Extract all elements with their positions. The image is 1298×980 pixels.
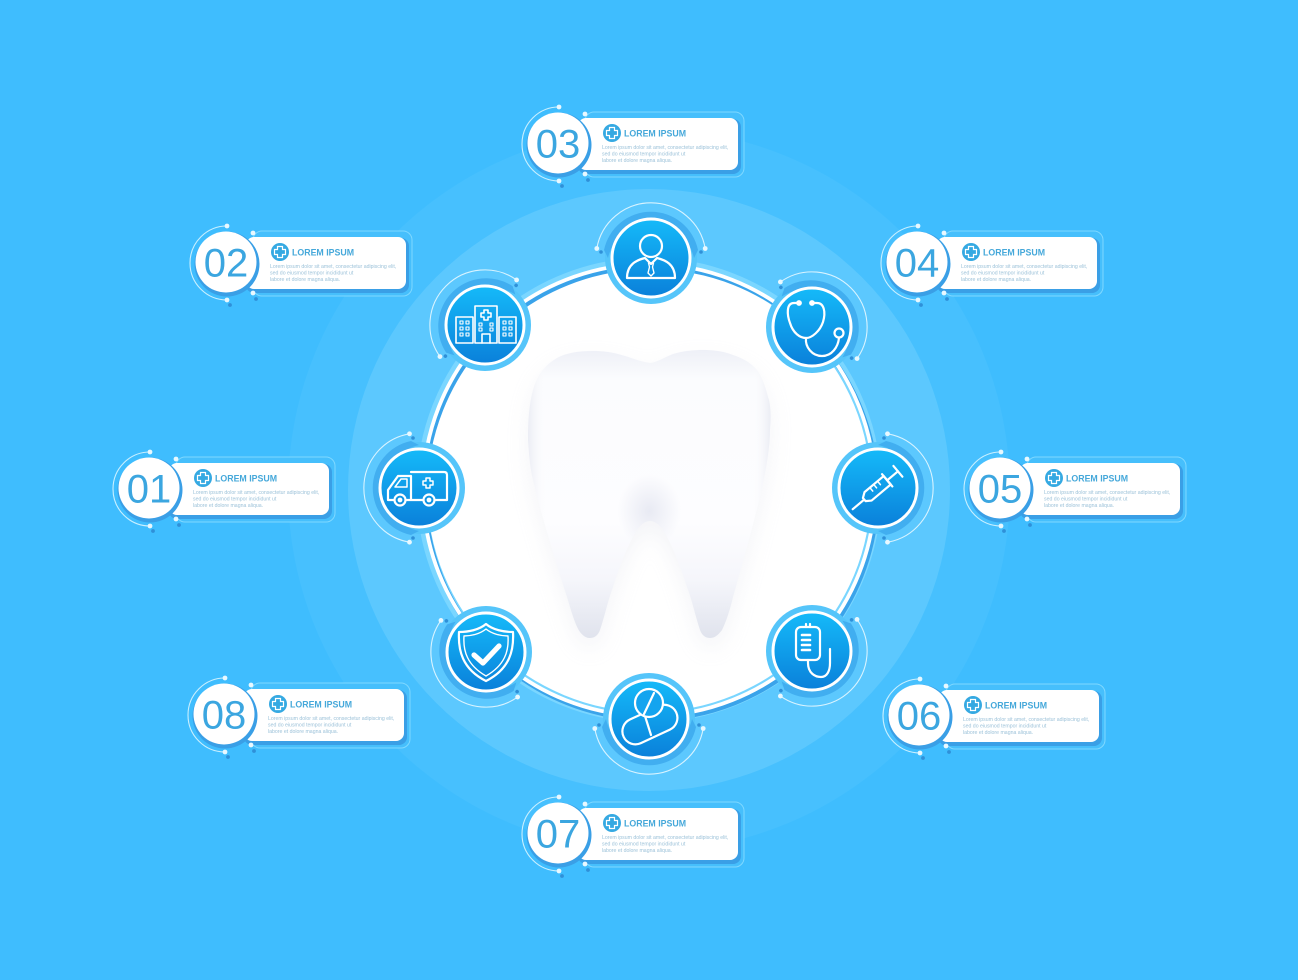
card 08: Lorem ipsum dolor sit amet, consectetur adipiscing elit, xyxy=(268,716,394,722)
card 06: LOREM IPSUM xyxy=(985,700,1047,710)
icon: stethoscope xyxy=(788,301,844,356)
middle background ring xyxy=(348,189,950,791)
card 04 xyxy=(881,224,1103,307)
card 06: Lorem ipsum dolor sit amet, consectetur adipiscing elit, xyxy=(963,717,1089,723)
icon: doctor xyxy=(627,235,675,278)
card 05: sed do eiusmod tempor incididunt ut xyxy=(1044,496,1128,502)
card 06: 06 xyxy=(897,694,941,738)
card 08 xyxy=(188,676,410,759)
card 02: 02 xyxy=(204,242,248,286)
card 01: labore et dolore magna aliqua. xyxy=(193,503,263,509)
card 05: labore et dolore magna aliqua. xyxy=(1044,503,1114,509)
card 01: Lorem ipsum dolor sit amet, consectetur adipiscing elit, xyxy=(193,490,319,496)
card 08: sed do eiusmod tempor incididunt ut xyxy=(268,722,352,728)
card 03: labore et dolore magna aliqua. xyxy=(602,158,672,164)
card 02: LOREM IPSUM xyxy=(292,248,354,258)
card 07: 07 xyxy=(536,812,580,856)
card 07 xyxy=(522,795,744,878)
tooth xyxy=(528,350,771,648)
card 01 xyxy=(113,450,335,533)
card 07: labore et dolore magna aliqua. xyxy=(602,848,672,854)
card 03 xyxy=(522,105,744,188)
node: iv bag xyxy=(739,578,891,730)
icon: ambulance xyxy=(388,472,447,506)
card 01: sed do eiusmod tempor incididunt ut xyxy=(193,496,277,502)
card 08: 08 xyxy=(202,694,246,738)
card 04: labore et dolore magna aliqua. xyxy=(961,277,1031,283)
central ring and white disk xyxy=(423,264,877,719)
card 05: 05 xyxy=(978,468,1022,512)
card 04: LOREM IPSUM xyxy=(983,248,1045,258)
card 06 xyxy=(883,677,1105,760)
card 01: 01 xyxy=(127,468,171,512)
card 04: Lorem ipsum dolor sit amet, consectetur adipiscing elit, xyxy=(961,264,1087,270)
card 05 xyxy=(964,450,1186,533)
node: pills xyxy=(592,673,706,774)
icon: pills xyxy=(618,689,682,749)
card 02: labore et dolore magna aliqua. xyxy=(270,277,340,283)
icon: shield xyxy=(459,624,513,681)
card 07: Lorem ipsum dolor sit amet, consectetur adipiscing elit, xyxy=(602,835,728,841)
icon: syringe xyxy=(848,465,903,515)
card 03: Lorem ipsum dolor sit amet, consectetur adipiscing elit, xyxy=(602,145,728,151)
card 07: LOREM IPSUM xyxy=(624,818,686,828)
card 08: labore et dolore magna aliqua. xyxy=(268,729,338,735)
card 06: sed do eiusmod tempor incididunt ut xyxy=(963,724,1047,730)
card 02: Lorem ipsum dolor sit amet, consectetur adipiscing elit, xyxy=(270,264,396,270)
card 03: sed do eiusmod tempor incididunt ut xyxy=(602,152,686,158)
icon: hospital xyxy=(456,306,516,343)
card 05: Lorem ipsum dolor sit amet, consectetur adipiscing elit, xyxy=(1044,490,1170,496)
node: doctor xyxy=(594,203,708,304)
icon: iv bag xyxy=(796,624,830,677)
node: syringe xyxy=(832,431,933,545)
card 04: 04 xyxy=(895,242,939,286)
card 02 xyxy=(190,224,412,307)
card 02: sed do eiusmod tempor incididunt ut xyxy=(270,270,354,276)
node: ambulance xyxy=(364,431,465,545)
card 08: LOREM IPSUM xyxy=(290,700,352,710)
card 03: LOREM IPSUM xyxy=(624,128,686,138)
card 04: sed do eiusmod tempor incididunt ut xyxy=(961,270,1045,276)
node: hospital xyxy=(406,246,558,398)
card 03: 03 xyxy=(536,122,580,166)
outer background ring xyxy=(288,129,1010,851)
node: shield xyxy=(407,579,559,731)
card 05: LOREM IPSUM xyxy=(1066,474,1128,484)
node: stethoscope xyxy=(739,248,891,400)
card 07: sed do eiusmod tempor incididunt ut xyxy=(602,842,686,848)
card 06: labore et dolore magna aliqua. xyxy=(963,730,1033,736)
card 01: LOREM IPSUM xyxy=(215,474,277,484)
